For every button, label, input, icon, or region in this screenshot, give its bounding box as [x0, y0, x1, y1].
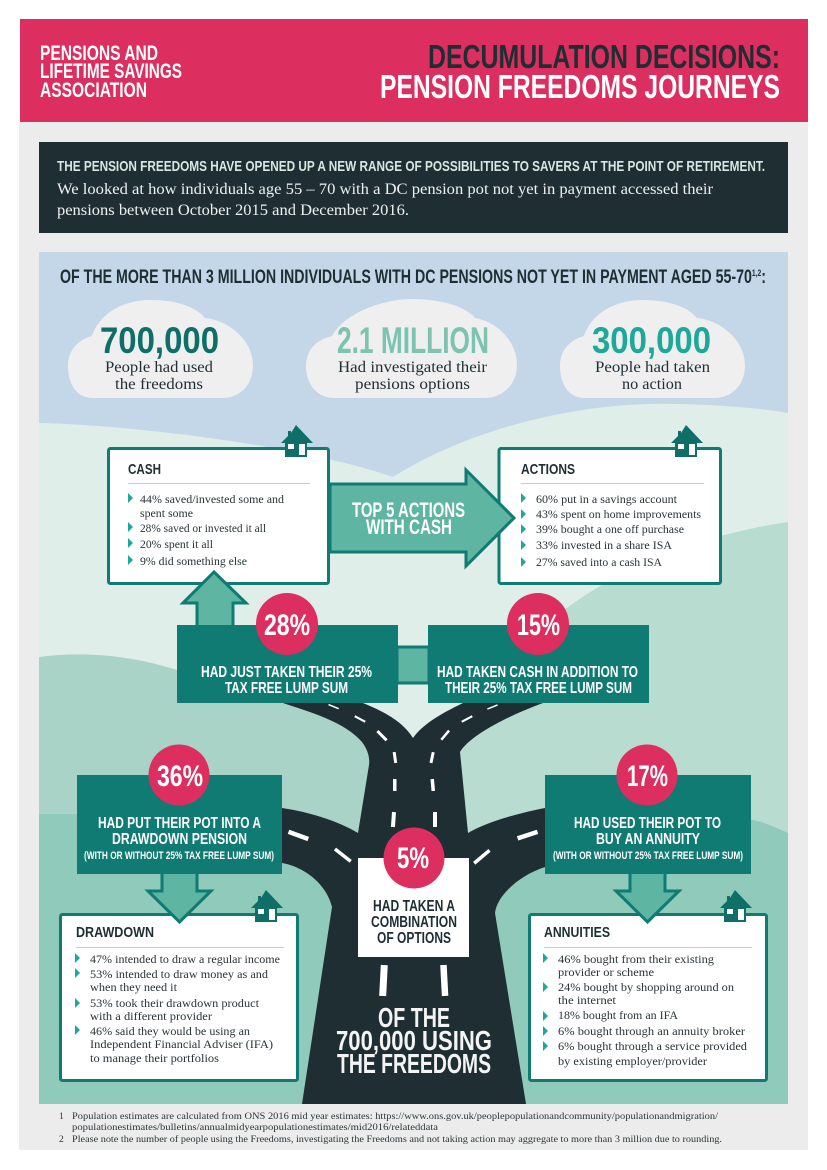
cloud: 700,000 — [68, 300, 253, 398]
road caption: 700,000 USING — [336, 1025, 492, 1056]
road caption: THE FREEDOMS — [337, 1048, 491, 1079]
panel: drawdown: with a different provider — [90, 1011, 212, 1023]
box: 28%: HAD JUST TAKEN THEIR 25% — [201, 664, 372, 681]
panel: cash: spent some — [140, 508, 193, 520]
box: 28%: TAX FREE LUMP SUM — [225, 680, 348, 697]
box: 17%: HAD USED THEIR POT TO — [574, 815, 721, 832]
panel: drawdown: Independent Financial Adviser (IFA) — [90, 1039, 273, 1051]
panel: actions: 39% bought a one off purchase — [536, 524, 684, 536]
panel: annuities: ANNUITIES — [544, 924, 610, 941]
panel: drawdown: 53% took their drawdown product — [90, 998, 260, 1010]
panel: annuities: 6% bought through an annuity broker — [558, 1026, 745, 1038]
header band — [20, 19, 808, 122]
box: 15% — [428, 593, 649, 703]
road — [282, 703, 545, 1104]
box: 5% combination: COMBINATION — [371, 914, 457, 931]
box: 15%: 15% — [517, 609, 560, 642]
cloud: 300,000: People had taken — [595, 359, 710, 376]
logo text: PENSIONS AND — [40, 42, 158, 65]
panel: cash: 20% spent it all — [140, 539, 213, 551]
panel: actions — [499, 448, 720, 584]
box: 36% — [77, 744, 282, 874]
road caption — [336, 1002, 492, 1079]
icon: house on drawdown panel — [251, 890, 283, 922]
panel: drawdown: to manage their portfolios — [90, 1053, 220, 1065]
intro panel — [39, 142, 788, 233]
panel: annuities: 6% bought through a service provided — [558, 1041, 747, 1053]
panel: annuities: provider or scheme — [558, 967, 654, 979]
panel: drawdown: 53% intended to draw money as and — [90, 969, 268, 981]
panel: cash: 28% saved or invested it all — [140, 523, 266, 535]
chart heading: : — [761, 267, 766, 288]
arrow: top 5 actions with cash — [330, 470, 514, 566]
footnotes: Please note the number of people using the Freedoms, investigating the Freedoms and not taking action may aggregate to more than 3 million due to rounding. — [72, 1134, 722, 1145]
box: 36%: 36% — [157, 760, 203, 793]
cloud: 2.1 million: 2.1 MILLION — [337, 320, 489, 361]
arrow: top 5 actions with cash: TOP 5 ACTIONS — [352, 499, 465, 522]
box: 28%: 28% — [264, 609, 310, 642]
box: 17% — [545, 744, 751, 874]
box: 5% combination: OF OPTIONS — [377, 930, 451, 947]
cloud: 700,000: People had used — [105, 359, 213, 376]
panel: annuities: 46% bought from their existing — [558, 954, 714, 966]
icon: house on annuities panel — [720, 890, 752, 922]
panel: annuities: the internet — [558, 995, 617, 1007]
box: 5% combination: 5% — [397, 842, 429, 875]
arrow: top 5 actions with cash: WITH CASH — [366, 516, 452, 539]
cloud: 2.1 million: Had investigated their — [338, 359, 488, 376]
main illustrated panel — [39, 252, 788, 1104]
panel: drawdown: when they need it — [90, 982, 178, 994]
background hills — [39, 404, 788, 1104]
logo text: ASSOCIATION — [40, 79, 147, 102]
box: 36%: DRAWDOWN PENSION — [112, 831, 247, 848]
panel: annuities: 24% bought by shopping around on — [558, 982, 734, 994]
footnotes: 1 — [59, 1112, 64, 1122]
panel: drawdown: 47% intended to draw a regular income — [90, 954, 280, 966]
box: 28% — [177, 593, 398, 703]
panel: drawdown: DRAWDOWN — [76, 924, 154, 941]
box: 17%: (WITH OR WITHOUT 25% TAX FREE LUMP SUM) — [553, 850, 743, 862]
panel: drawdown — [60, 914, 298, 1080]
panel: actions: 60% put in a savings account — [536, 494, 678, 506]
icon: house on cash panel — [281, 425, 313, 457]
box: 15%: HAD TAKEN CASH IN ADDITION TO — [437, 664, 638, 681]
panel: actions: ACTIONS — [521, 461, 575, 478]
panel: cash: 44% saved/invested some and — [140, 494, 284, 506]
box: 5% combination: HAD TAKEN A — [373, 898, 455, 915]
footnotes: 2 — [59, 1135, 64, 1145]
cloud: 300,000: 300,000 — [592, 320, 711, 361]
box: 15%: THEIR 25% TAX FREE LUMP SUM — [445, 680, 632, 697]
logo text: LIFETIME SAVINGS — [40, 60, 182, 83]
logo text — [40, 42, 182, 102]
intro panel: pensions between October 2015 and December 2016. — [57, 202, 409, 219]
panel: cash — [108, 448, 328, 584]
panel: drawdown: 46% said they would be using an — [90, 1026, 250, 1038]
cloud: 700,000: the freedoms — [115, 376, 203, 393]
panel: actions: 43% spent on home improvements — [536, 509, 702, 521]
box: 17%: 17% — [627, 760, 668, 793]
panel: cash: 9% did something else — [140, 556, 247, 568]
arrow: drawdown down — [148, 872, 211, 922]
cloud: 2.1 million — [306, 299, 517, 398]
cloud: 2.1 million: pensions options — [355, 376, 470, 393]
panel: annuities: 18% bought from an IFA — [558, 1010, 679, 1022]
panel: actions: 33% invested in a share ISA — [536, 540, 673, 552]
panel: annuities — [530, 914, 766, 1080]
cloud: 300,000 — [560, 300, 745, 398]
arrow: annuities down — [616, 872, 679, 922]
panel: cash: CASH — [128, 461, 161, 478]
cloud: 300,000: no action — [622, 376, 682, 393]
footnotes — [59, 1111, 722, 1145]
chart heading: 1,2 — [752, 268, 761, 278]
panel: annuities: by existing employer/provider — [558, 1056, 707, 1068]
box: 5% combination — [358, 828, 469, 957]
icon: house on actions panel — [671, 425, 703, 457]
box: 17%: BUY AN ANNUITY — [596, 831, 700, 848]
panel: actions: 27% saved into a cash ISA — [536, 557, 663, 569]
box: 36%: (WITH OR WITHOUT 25% TAX FREE LUMP SUM) — [84, 850, 274, 862]
footnotes: populationestimates/bulletins/annualmidyearpopulationestimates/mid2016/relateddata — [72, 1123, 439, 1133]
intro panel: We looked at how individuals age 55 – 70 with a DC pension pot not yet in payment accessed their — [57, 181, 714, 198]
road caption: OF THE — [378, 1002, 450, 1033]
footnotes: Population estimates are calculated from ONS 2016 mid year estimates: https://www.ons.gov.uk/peoplepopulationandcommunity/populationandmigration/ — [72, 1111, 718, 1122]
title — [380, 38, 780, 105]
box: 36%: HAD PUT THEIR POT INTO A — [98, 815, 261, 832]
arrow: up to cash — [183, 572, 246, 627]
connector between boxes — [397, 647, 429, 683]
cloud: 700,000: 700,000 — [100, 320, 219, 361]
